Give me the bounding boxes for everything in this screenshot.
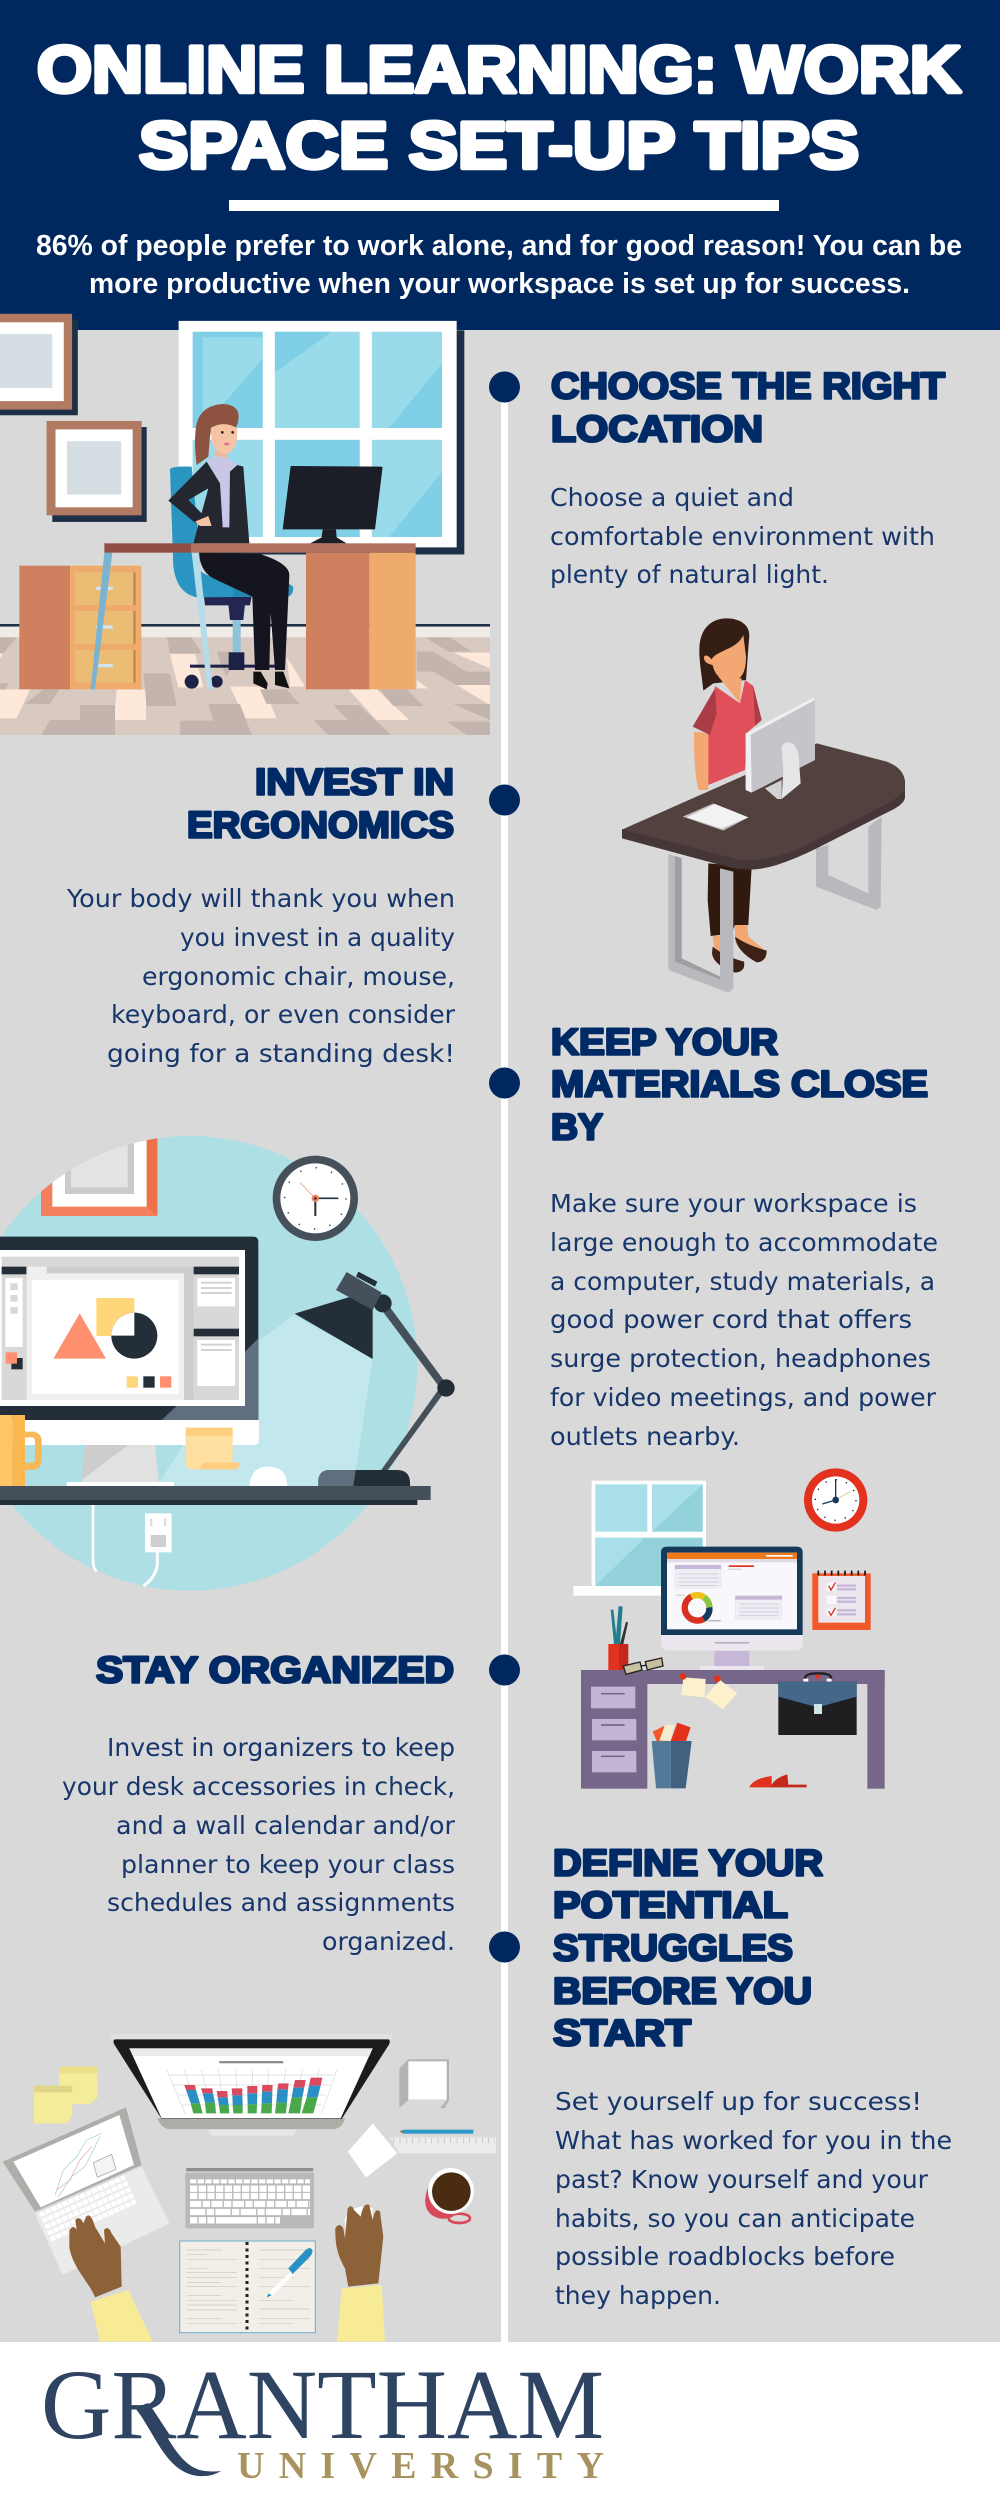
clock bbox=[804, 1468, 867, 1532]
mug bbox=[0, 1415, 42, 1486]
heading: invest in ergonomics bbox=[187, 762, 454, 846]
title: ONLINE LEARNING: WORK bbox=[37, 32, 961, 106]
text: choose the right location bbox=[550, 483, 935, 589]
text: keep your materials close by: a computer, study materials, a bbox=[550, 1267, 935, 1296]
text: keep your materials close by: surge protection, headphones bbox=[550, 1344, 931, 1373]
heading: choose the right location bbox=[551, 366, 945, 450]
notebook bbox=[180, 2241, 315, 2333]
intro text: 86% of people prefer to work alone, and for good reason! You can be bbox=[36, 230, 962, 262]
text: keep your materials close by bbox=[550, 1189, 938, 1451]
header banner bbox=[0, 0, 1000, 330]
sticky note bbox=[186, 1428, 240, 1469]
illustration: computer and lamp in circle bbox=[0, 1133, 455, 1591]
laptop bbox=[3, 2107, 169, 2275]
wall frame bbox=[41, 1133, 157, 1216]
donut chart bbox=[685, 1595, 709, 1621]
office desk bbox=[91, 543, 416, 689]
heading: keep your materials close by: MATERIALS CLOSE bbox=[551, 1064, 928, 1104]
woman bbox=[168, 404, 289, 689]
monitor bbox=[283, 466, 383, 543]
text: stay organized: organized. bbox=[322, 1927, 455, 1956]
heading: keep your materials close by bbox=[551, 1022, 928, 1148]
window bbox=[573, 1481, 706, 1596]
logo: Grantham University: UNIVERSITY bbox=[237, 2445, 604, 2487]
text: keep your materials close by: good power cord that offers bbox=[550, 1305, 912, 1334]
text: choose the right location: comfortable environment with bbox=[550, 522, 935, 551]
heading: define your potential struggles: BEFORE YOU bbox=[553, 1970, 812, 2012]
left drawer unit bbox=[19, 566, 141, 689]
monitor bbox=[746, 698, 815, 799]
text: keep your materials close by: for video meetings, and power bbox=[550, 1383, 937, 1412]
text: stay organized: and a wall calendar and/or bbox=[116, 1811, 456, 1840]
pants and shoes bbox=[708, 863, 767, 973]
text: keep your materials close by: Make sure your workspace is bbox=[550, 1189, 917, 1218]
logo: Grantham University: GRANTHAM bbox=[41, 2349, 604, 2460]
slippers bbox=[749, 1774, 807, 1787]
text: choose the right location: plenty of natural light. bbox=[550, 560, 829, 589]
text: stay organized bbox=[62, 1733, 456, 1956]
heading: define your potential struggles bbox=[553, 1842, 823, 2054]
monitor bbox=[0, 1237, 259, 1486]
wall frames and window bbox=[0, 314, 464, 554]
text: invest in ergonomics bbox=[66, 884, 456, 1068]
floor bbox=[0, 624, 490, 740]
heading: keep your materials close by: KEEP YOUR bbox=[551, 1022, 778, 1062]
intro text: more productive when your workspace is set up for success. bbox=[89, 268, 910, 300]
woman bbox=[693, 618, 762, 790]
illustration: woman at office desk bbox=[0, 314, 490, 740]
heading: define your potential struggles: STRUGGLES bbox=[553, 1928, 793, 1968]
bar chart bbox=[184, 2078, 322, 2113]
title: SPACE SET-UP TIPS bbox=[139, 108, 859, 182]
illustration: desk from above bbox=[3, 2034, 496, 2342]
desk note cube bbox=[399, 2059, 449, 2108]
pen cup bbox=[608, 1606, 628, 1670]
desk bbox=[581, 1670, 885, 1789]
monitor bbox=[661, 1547, 803, 1670]
heading: keep your materials close by: BY bbox=[551, 1106, 603, 1148]
calendar bbox=[812, 1571, 871, 1630]
text: define your potential struggles: Set yourself up for success! bbox=[555, 2087, 922, 2116]
mouse bbox=[249, 1467, 287, 1486]
table bbox=[0, 1486, 431, 1505]
heading: define your potential struggles: START bbox=[553, 2012, 691, 2054]
coffee cup bbox=[425, 2168, 474, 2223]
text: define your potential struggles: What has worked for you in the bbox=[555, 2126, 952, 2155]
title bbox=[37, 32, 961, 182]
chair bbox=[170, 467, 293, 689]
waste bin bbox=[652, 1723, 692, 1788]
text: stay organized: schedules and assignments bbox=[107, 1888, 455, 1917]
title rule bbox=[229, 200, 779, 211]
pinned notes bbox=[680, 1673, 737, 1709]
sticky notes bbox=[34, 2067, 97, 2123]
text: invest in ergonomics: you invest in a quality bbox=[180, 923, 455, 952]
paper and ruler bbox=[348, 2123, 496, 2178]
illustration: desk with computer bbox=[573, 1468, 885, 1789]
text: invest in ergonomics: going for a standing desk! bbox=[107, 1039, 455, 1068]
keyboard bbox=[185, 2168, 314, 2228]
heading: invest in ergonomics: INVEST IN bbox=[255, 762, 454, 802]
heading: invest in ergonomics: ERGONOMICS bbox=[187, 804, 454, 846]
monitor with bar chart bbox=[111, 2034, 393, 2136]
heading: define your potential struggles: POTENTIAL bbox=[553, 1884, 788, 1926]
text: invest in ergonomics: Your body will thank you when bbox=[66, 884, 455, 913]
logo swash bbox=[135, 2403, 221, 2476]
blue circle bbox=[0, 1136, 417, 1591]
intro text bbox=[36, 230, 962, 300]
text: stay organized: Invest in organizers to keep bbox=[107, 1733, 455, 1762]
heading: define your potential struggles: DEFINE YOUR bbox=[553, 1842, 823, 1884]
text: invest in ergonomics: ergonomic chair, mouse, bbox=[142, 962, 455, 991]
text: keep your materials close by: large enough to accommodate bbox=[550, 1228, 938, 1257]
left hand and sleeve bbox=[69, 2215, 153, 2342]
text: define your potential struggles: they happen. bbox=[555, 2281, 721, 2310]
paper bbox=[683, 803, 748, 831]
briefcase bbox=[778, 1673, 857, 1735]
illustration: woman at standing desk bbox=[622, 618, 905, 993]
text: choose the right location: Choose a quiet and bbox=[550, 483, 794, 512]
clock bbox=[273, 1156, 358, 1241]
text: invest in ergonomics: keyboard, or even consider bbox=[111, 1000, 456, 1029]
heading: choose the right location: LOCATION bbox=[551, 408, 763, 450]
text: stay organized: planner to keep your class bbox=[121, 1850, 455, 1879]
right hand and sleeve bbox=[335, 2204, 385, 2342]
back desk leg bbox=[816, 817, 882, 910]
text: define your potential struggles: possible roadblocks before bbox=[555, 2242, 895, 2271]
desk lamp bbox=[295, 1272, 455, 1486]
desk top bbox=[622, 743, 905, 870]
light beam bbox=[157, 1315, 373, 1486]
text: keep your materials close by: outlets nearby. bbox=[550, 1422, 740, 1451]
front desk leg bbox=[668, 854, 733, 993]
timeline line bbox=[501, 387, 508, 2342]
timeline dots bbox=[489, 372, 520, 1962]
text: define your potential struggles: past? Know yourself and your bbox=[555, 2165, 929, 2194]
text: define your potential struggles bbox=[555, 2087, 952, 2310]
glasses bbox=[623, 1658, 663, 1674]
text: stay organized: your desk accessories in check, bbox=[62, 1772, 455, 1801]
cable and socket bbox=[93, 1505, 172, 1586]
heading: stay organized: STAY ORGANIZED bbox=[96, 1650, 454, 1690]
heading: choose the right location: CHOOSE THE RIGHT bbox=[551, 366, 945, 406]
text: define your potential struggles: habits, so you can anticipate bbox=[555, 2204, 915, 2233]
